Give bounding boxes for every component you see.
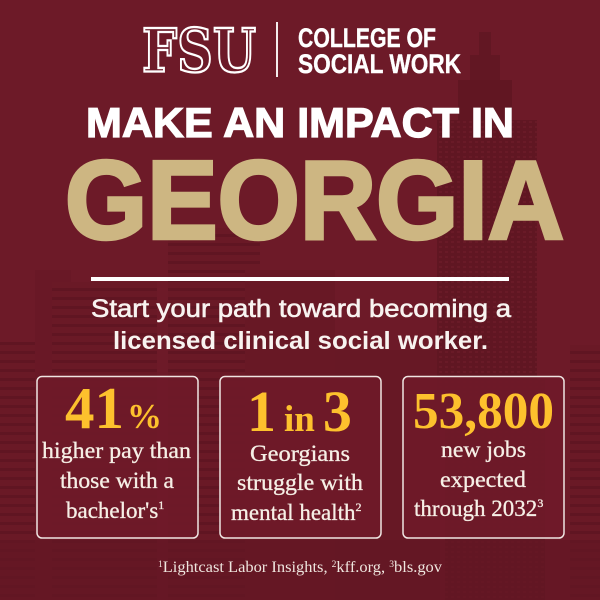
college name: SOCIAL WORK (298, 49, 461, 79)
description: 3 (537, 496, 543, 510)
FSU wordmark: FSU (142, 16, 256, 86)
description: 1 (158, 498, 164, 512)
college name (298, 23, 461, 79)
description: 2 (356, 500, 362, 514)
description: new jobs (441, 437, 526, 462)
footnote sources: 1 (158, 559, 163, 569)
stat: 53,800: 53,800 (413, 383, 554, 440)
stat: 41%: 41% (65, 375, 162, 441)
footnote sources: bls.gov (394, 559, 442, 576)
panel: 53,800 jobs (403, 376, 564, 538)
description: bachelor's (66, 498, 158, 523)
logo (142, 16, 461, 86)
description: those with a (60, 468, 174, 493)
footnote sources: 2 (332, 559, 336, 569)
description: Georgians (250, 441, 350, 466)
panel: 41% higher pay (37, 375, 198, 538)
panel: 1 in 3 (220, 376, 381, 538)
stat: 1 in 3: 1in3 (247, 379, 352, 444)
description: higher pay than (42, 438, 192, 463)
footnote sources: Lightcast Labor Insights, (163, 559, 332, 576)
footnote sources: kff.org, (336, 559, 389, 576)
heading: Georgia: GEORGIA (65, 138, 564, 262)
subheading: licensed clinical social worker. (113, 327, 488, 355)
description (42, 438, 192, 523)
logo divider (276, 22, 278, 77)
description: mental health (231, 500, 356, 525)
college name: COLLEGE OF (298, 23, 436, 53)
footnote sources: 3 (389, 559, 395, 569)
description: struggle with (237, 470, 364, 495)
divider (91, 277, 509, 281)
description (231, 441, 364, 525)
heading: make an impact in: MAKE AN IMPACT IN (86, 99, 514, 146)
description: through 2032 (414, 496, 537, 521)
description (414, 437, 543, 521)
subheading (91, 295, 511, 355)
description: expected (440, 467, 527, 492)
subheading: Start your path toward becoming a (91, 295, 511, 323)
